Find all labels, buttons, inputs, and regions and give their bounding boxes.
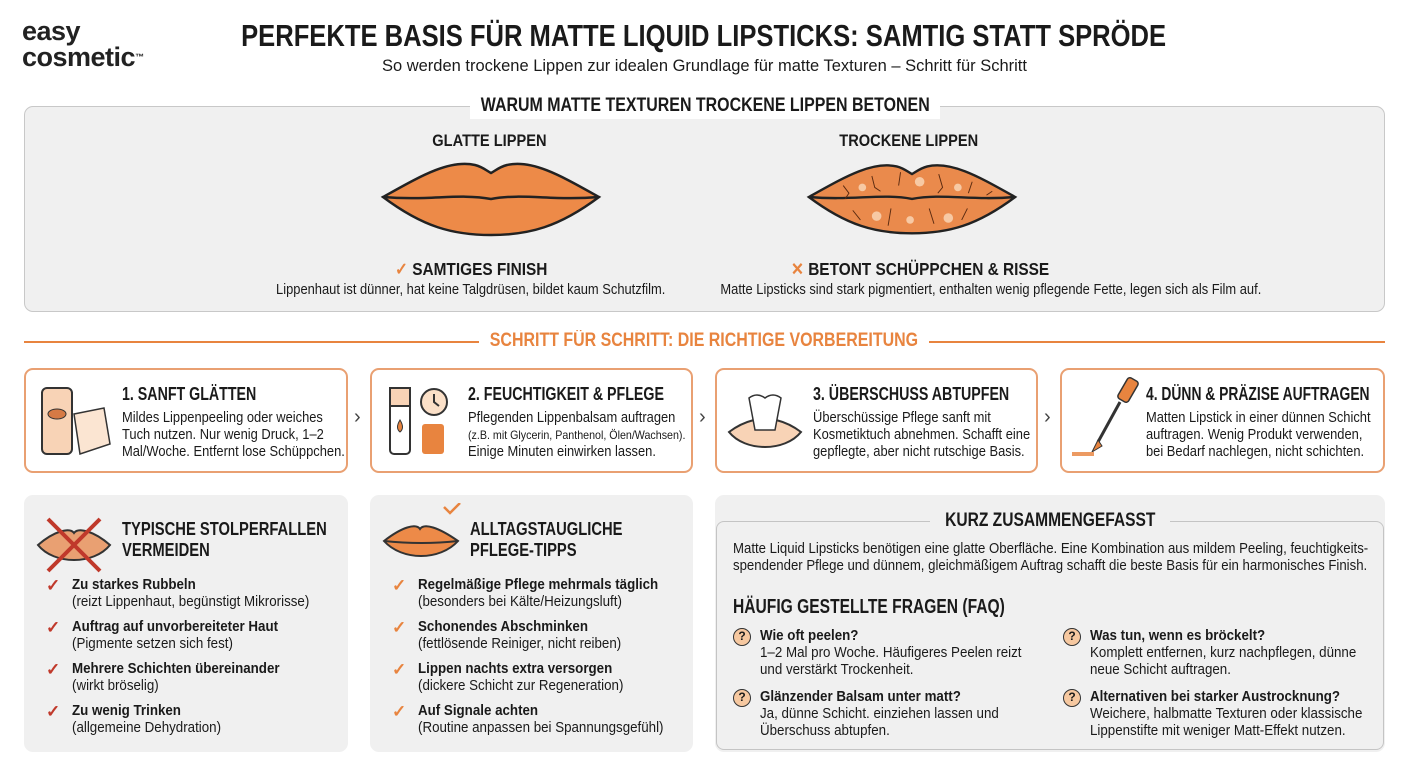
list: stolperfallen: ✓ xyxy=(46,618,60,637)
list: stolperfallen: Mehrere Schichten übereinander xyxy=(72,661,280,677)
card: step 4: 4. DÜNN & PRÄZISE AUFTRAGEN xyxy=(1146,384,1370,404)
list: stolperfallen: (wirkt bröselig) xyxy=(72,678,159,694)
heading: pflege-tipps: PFLEGE-TIPPS xyxy=(470,540,577,560)
card: step 2: Einige Minuten einwirken lassen. xyxy=(468,444,656,460)
icon: tissue lips xyxy=(728,394,802,448)
card: step 2 xyxy=(370,368,693,473)
icon: balm xyxy=(389,387,448,455)
list: stolperfallen: (reizt Lippenhaut, begünstigt Mikrorisse) xyxy=(72,594,309,610)
list: tipps: (dickere Schicht zur Regeneration) xyxy=(418,678,623,694)
card: step 3: gepflegte, aber nicht rutschige Basis. xyxy=(813,444,1025,460)
heading: stolperfallen: TYPISCHE STOLPERFALLEN xyxy=(122,519,327,539)
card: step 1 xyxy=(24,368,348,473)
icon: lips with check xyxy=(382,503,461,557)
list: tipps: Schonendes Abschminken xyxy=(418,619,588,635)
logo: easy xyxy=(22,16,80,46)
icon: tube xyxy=(41,387,111,455)
label: trockene lippen: TROCKENE LIPPEN xyxy=(840,131,978,150)
arrow 2: › xyxy=(699,406,706,428)
card: step 3: Überschüssige Pflege sanft mit xyxy=(813,410,991,426)
panel: zusammenfassung & faq xyxy=(715,495,1385,752)
panel: stolperfallen xyxy=(24,495,348,752)
icon: applicator xyxy=(1072,377,1139,456)
card: step 3 xyxy=(715,368,1038,473)
faq 3 xyxy=(1063,628,1356,678)
card: step 2: Pflegenden Lippenbalsam auftragen xyxy=(468,410,675,426)
list: stolperfallen: ✓ xyxy=(46,660,60,679)
list: stolperfallen: ✓ xyxy=(46,702,60,721)
cross: betont: ✕ BETONT SCHÜPPCHEN & RISSE xyxy=(791,259,1049,279)
text: summary: spendender Pflege und dünnem, gleichmäßigem Auftrag schafft die beste Basis für ein harmonisches Finish. xyxy=(733,558,1367,574)
arrow 3: › xyxy=(1044,406,1051,428)
faq 1 xyxy=(733,628,1022,678)
list: tipps: (Routine anpassen bei Spannungsgefühl) xyxy=(418,720,663,736)
heading: warum: WARUM MATTE TEXTUREN TROCKENE LIPPEN BETONEN xyxy=(481,95,929,116)
list: stolperfallen: (allgemeine Dehydration) xyxy=(72,720,221,736)
label: glatte lippen: GLATTE LIPPEN xyxy=(432,131,546,150)
check: samtiges finish: ✓ SAMTIGES FINISH xyxy=(395,259,547,279)
card: step 1: Mildes Lippenpeeling oder weiches xyxy=(122,410,323,426)
section heading: schritt für schritt: SCHRITT FÜR SCHRITT: DIE RICHTIGE VORBEREITUNG xyxy=(490,330,918,351)
list: tipps: ✓ xyxy=(392,618,406,637)
list: tipps: Regelmäßige Pflege mehrmals täglich xyxy=(418,577,658,593)
list: tipps: Auf Signale achten xyxy=(418,703,538,719)
card: step 4: bei Bedarf nachlegen, nicht schichten. xyxy=(1146,444,1364,460)
faq 3: ? xyxy=(1068,629,1076,643)
heading: kurz zusammengefasst: KURZ ZUSAMMENGEFASST xyxy=(945,510,1155,531)
card: step 2: 2. FEUCHTIGKEIT & PFLEGE xyxy=(468,384,664,404)
faq 4: Alternativen bei starker Austrocknung? xyxy=(1090,689,1340,705)
list: stolperfallen: ✓ xyxy=(46,576,60,595)
card: step 4: Matten Lipstick in einer dünnen Schicht xyxy=(1146,410,1371,426)
subtitle: So werden trockene Lippen zur idealen Grundlage für matte Texturen – Schritt für Schritt xyxy=(382,56,1026,75)
title: PERFEKTE BASIS FÜR MATTE LIQUID LIPSTICKS: SAMTIG STATT SPRÖDE xyxy=(242,18,1166,53)
faq 1: 1–2 Mal pro Woche. Häufigeres Peelen reizt xyxy=(760,645,1022,661)
text: lippenhaut: Lippenhaut ist dünner, hat keine Talgdrüsen, bildet kaum Schutzfilm. xyxy=(276,282,666,298)
faq 4 xyxy=(1063,689,1362,739)
faq 2: ? xyxy=(738,690,746,704)
heading: pflege-tipps xyxy=(470,519,623,560)
card: step 1: 1. SANFT GLÄTTEN xyxy=(122,384,256,404)
icon: smooth lips xyxy=(380,162,602,236)
heading: stolperfallen xyxy=(122,519,327,560)
heading: stolperfallen: VERMEIDEN xyxy=(122,540,210,560)
faq 2: Überschuss abtupfen. xyxy=(760,723,890,739)
card: step 3: 3. ÜBERSCHUSS ABTUPFEN xyxy=(813,384,1009,404)
faq 2: Ja, dünne Schicht. einziehen lassen und xyxy=(760,706,999,722)
icon: crossed dry lips xyxy=(36,518,112,572)
heading: pflege-tipps: ALLTAGSTAUGLICHE xyxy=(470,519,623,539)
arrow 1: › xyxy=(354,406,361,428)
list: stolperfallen xyxy=(46,576,309,736)
faq 2 xyxy=(733,689,999,739)
list: stolperfallen: Zu starkes Rubbeln xyxy=(72,577,196,593)
text: summary xyxy=(733,541,1368,574)
faq 2: Glänzender Balsam unter matt? xyxy=(760,689,961,705)
section heading: schritt für schritt xyxy=(24,330,1385,351)
list: tipps: (besonders bei Kälte/Heizungsluft) xyxy=(418,594,622,610)
faq 1: ? xyxy=(738,629,746,643)
card: step 1: Mal/Woche. Entfernt lose Schüppchen. xyxy=(122,444,345,460)
faq 3: Komplett entfernen, kurz nachpflegen, dünne xyxy=(1090,645,1356,661)
list: stolperfallen: (Pigmente setzen sich fest) xyxy=(72,636,233,652)
list: tipps: (fettlösende Reiniger, nicht reiben) xyxy=(418,636,621,652)
card: step 1: Tuch nutzen. Nur wenig Druck, 1–2 xyxy=(122,427,324,443)
list: tipps: Lippen nachts extra versorgen xyxy=(418,661,612,677)
list: stolperfallen: Auftrag auf unvorbereiteter Haut xyxy=(72,619,278,635)
text: summary: Matte Liquid Lipsticks benötigen eine glatte Oberfläche. Eine Kombination aus mildem Peeling, feuchtigkeits- xyxy=(733,541,1368,557)
list: tipps xyxy=(392,576,663,736)
card: step 4: auftragen. Wenig Produkt verwenden, xyxy=(1146,427,1362,443)
logo xyxy=(22,16,144,72)
panel: comparison xyxy=(24,106,1385,312)
list: tipps: ✓ xyxy=(392,702,406,721)
faq 4: Lippenstifte mit weniger Matt-Effekt nutzen. xyxy=(1090,723,1346,739)
list: stolperfallen: Zu wenig Trinken xyxy=(72,703,181,719)
list: tipps: ✓ xyxy=(392,660,406,679)
logo: cosmetic™ xyxy=(22,42,144,72)
faq 1: und verstärkt Trockenheit. xyxy=(760,662,913,678)
icon: dry lips xyxy=(806,164,1018,234)
card: step 2: (z.B. mit Glycerin, Panthenol, Ölen/Wachsen). xyxy=(468,428,685,442)
text: matte lipsticks: Matte Lipsticks sind stark pigmentiert, enthalten wenig pflegende Fette, legen sich als Film auf. xyxy=(721,282,1261,298)
card: step 3: Kosmetiktuch abnehmen. Schafft eine xyxy=(813,427,1030,443)
panel: pflege-tipps xyxy=(370,495,693,752)
faq 1: Wie oft peelen? xyxy=(760,628,858,644)
faq 3: neue Schicht auftragen. xyxy=(1090,662,1231,678)
list: tipps: ✓ xyxy=(392,576,406,595)
faq 3: Was tun, wenn es bröckelt? xyxy=(1090,628,1265,644)
faq 4: Weichere, halbmatte Texturen oder klassische xyxy=(1090,706,1362,722)
card: step 4 xyxy=(1060,368,1385,473)
heading: faq: HÄUFIG GESTELLTE FRAGEN (FAQ) xyxy=(733,596,1005,618)
faq 4: ? xyxy=(1068,690,1076,704)
